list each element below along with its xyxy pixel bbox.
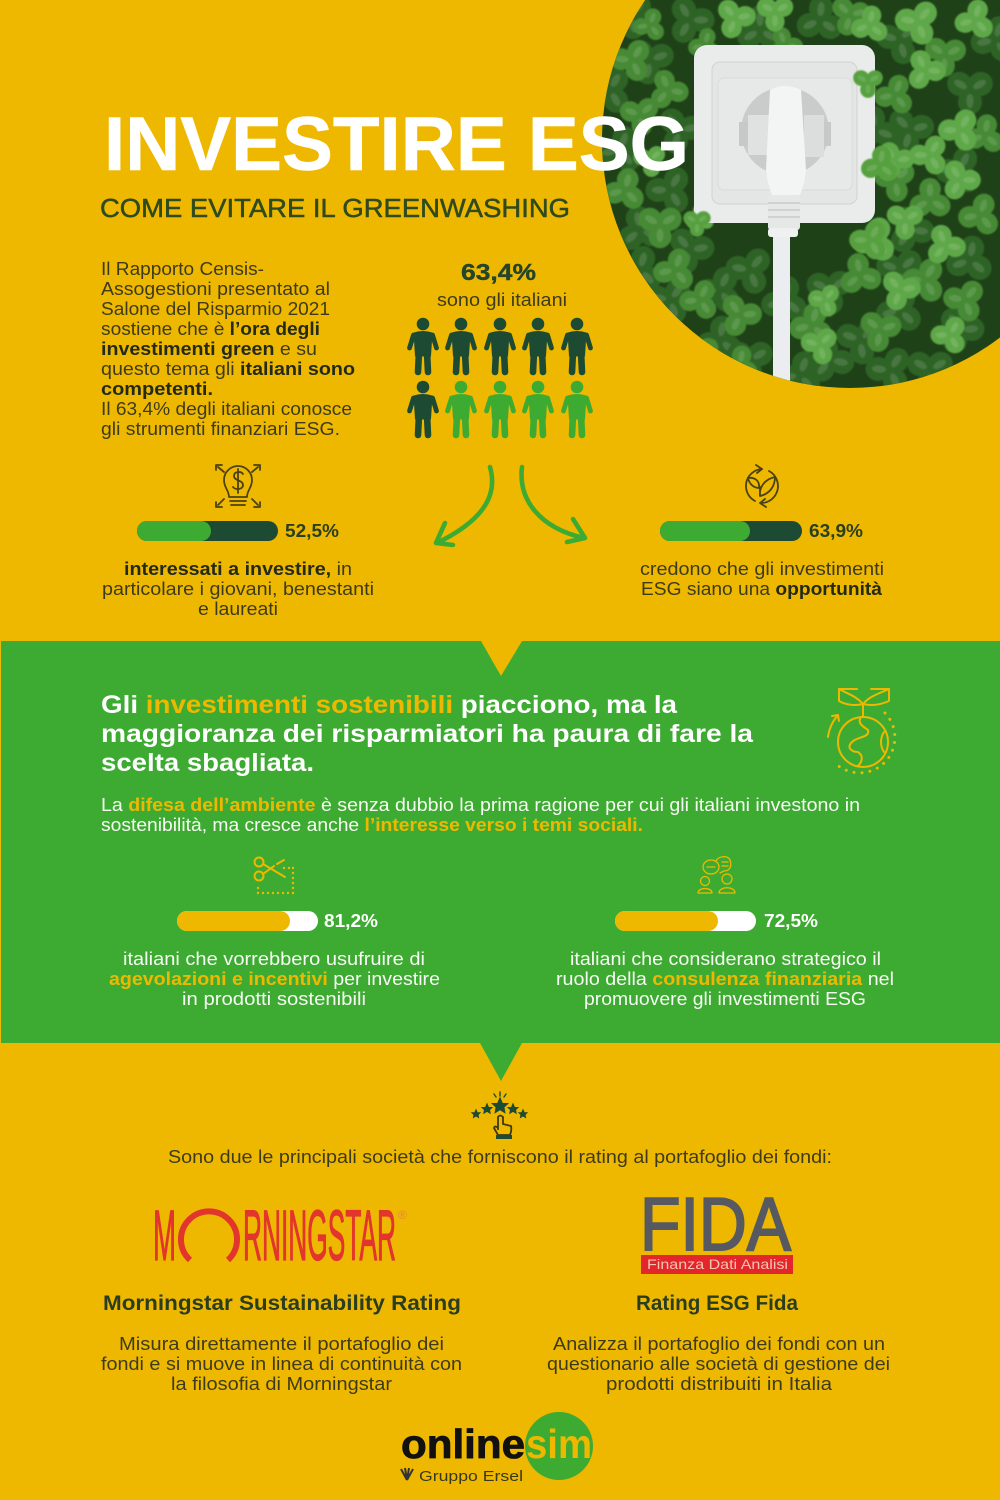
panel: green section [1,641,1000,1081]
label: financial advice: promuovere gli investimenti ESG [584,989,866,1009]
intro paragraph: sostiene che è l’ora degli [101,319,320,339]
label: incentives: agevolazioni e incentivi per investire [109,969,440,989]
subtitle: COME EVITARE IL GREENWASHING [100,193,570,223]
icon: light bulb with dollar [216,465,260,507]
progress bar: 52,5%: 52,5% [285,521,339,541]
panel paragraph: sostenibilità, ma cresce anche l’interesse verso i temi sociali. [101,815,643,835]
progress bar: 52,5% [137,521,339,541]
label: interested investors: interessati a investire, in [124,559,352,579]
text: Fida description: prodotti distribuiti in Italia [606,1374,833,1394]
stat: 63,4% [437,259,567,310]
label: incentives [109,949,440,1009]
text: Morningstar description: fondi e si muove in linea di continuità con [101,1354,462,1374]
icon: scissors [254,858,293,893]
intro paragraph: Assogestioni presentato al [101,279,330,299]
panel heading: maggioranza dei risparmiatori ha paura di fare la [101,720,754,748]
logo: onlinesim: online [401,1421,525,1467]
text: Fida description: questionario alle società di gestione dei [547,1354,890,1374]
panel heading [101,691,754,777]
label: financial advice: ruolo della consulenza finanziaria nel [556,969,894,989]
icon: leaf cycle [746,465,778,507]
label: incentives: in prodotti sostenibili [182,989,366,1009]
logo: onlinesim: Gruppo Ersel [419,1468,523,1485]
intro paragraph: Salone del Risparmio 2021 [101,299,330,319]
text: Morningstar description: Misura direttamente il portafoglio dei [119,1334,444,1354]
panel paragraph [101,795,860,835]
logo: onlinesim: sim [526,1421,592,1467]
progress bar: 81,2%: 81,2% [324,911,378,931]
intro paragraph: gli strumenti finanziari ESG. [101,419,340,439]
logo: Morningstar: ® [398,1208,407,1222]
intro paragraph: Il Rapporto Censis- [101,259,264,279]
label: interested investors: e laureati [198,599,278,619]
intro paragraph [101,259,355,439]
text: Morningstar description: la filosofia di Morningstar [171,1374,392,1394]
intro paragraph: Il 63,4% degli italiani conosce [101,399,352,419]
panel heading: Gli investimenti sostenibili piacciono, ma la [101,691,678,719]
label: opportunity: ESG siano una opportunità [641,579,883,599]
stat: 63,4%: sono gli italiani [437,290,567,310]
progress bar: 63,9% [660,521,863,541]
text: Fida description: Analizza il portafoglio dei fondi con un [553,1334,885,1354]
label: incentives: italiani che vorrebbero usufruire di [123,949,425,969]
logo: onlinesim [401,1412,593,1485]
logo: Morningstar [153,1197,407,1276]
label: opportunity [640,559,884,599]
panel heading: scelta sbagliata. [101,749,314,777]
label: financial advice [556,949,894,1009]
socket plate [694,45,875,223]
heading: Fida rating: Rating ESG Fida [636,1292,798,1315]
text: Fida description [547,1334,890,1394]
infographic canvas: RNINGSTAR [243,1197,396,1276]
intro paragraph: competenti. [101,379,213,399]
heading: Morningstar rating: Morningstar Sustainability Rating [103,1292,461,1315]
rating intro text: Sono due le principali società che forniscono il rating al portafoglio dei fondi: [168,1147,832,1167]
intro paragraph: investimenti green e su [101,339,317,359]
arrow: left [436,467,492,545]
plug and cord [766,86,806,385]
intro paragraph: questo tema gli italiani sono [101,359,355,379]
logo: Morningstar: M [153,1197,176,1276]
logo: Fida: Finanza Dati Analisi [647,1256,788,1272]
icon: stars and hand [471,1092,528,1139]
progress bar: 63,9%: 63,9% [809,521,863,541]
progress bar: 72,5%: 72,5% [764,911,818,931]
title: INVESTIRE ESG [104,102,689,187]
icon: people talking [698,857,735,893]
label: financial advice: italiani che considerano strategico il [570,949,881,969]
label: opportunity: credono che gli investimenti [640,559,884,579]
label: interested investors: particolare i giovani, benestanti [102,579,374,599]
pictogram: ten people [410,318,590,435]
stat: 63,4%: 63,4% [461,259,536,285]
text: Morningstar description [101,1334,462,1394]
icon: globe with sprout [828,689,895,773]
photo: plug and socket in clover [602,0,1000,388]
progress bar: 81,2% [177,911,378,931]
progress bar: 72,5% [615,911,818,931]
label: interested investors [102,559,374,619]
logo: Fida: FIDA [640,1182,791,1266]
panel paragraph: La difesa dell’ambiente è senza dubbio la prima ragione per cui gli italiani investono in [101,795,860,815]
arrow: right [522,467,585,542]
